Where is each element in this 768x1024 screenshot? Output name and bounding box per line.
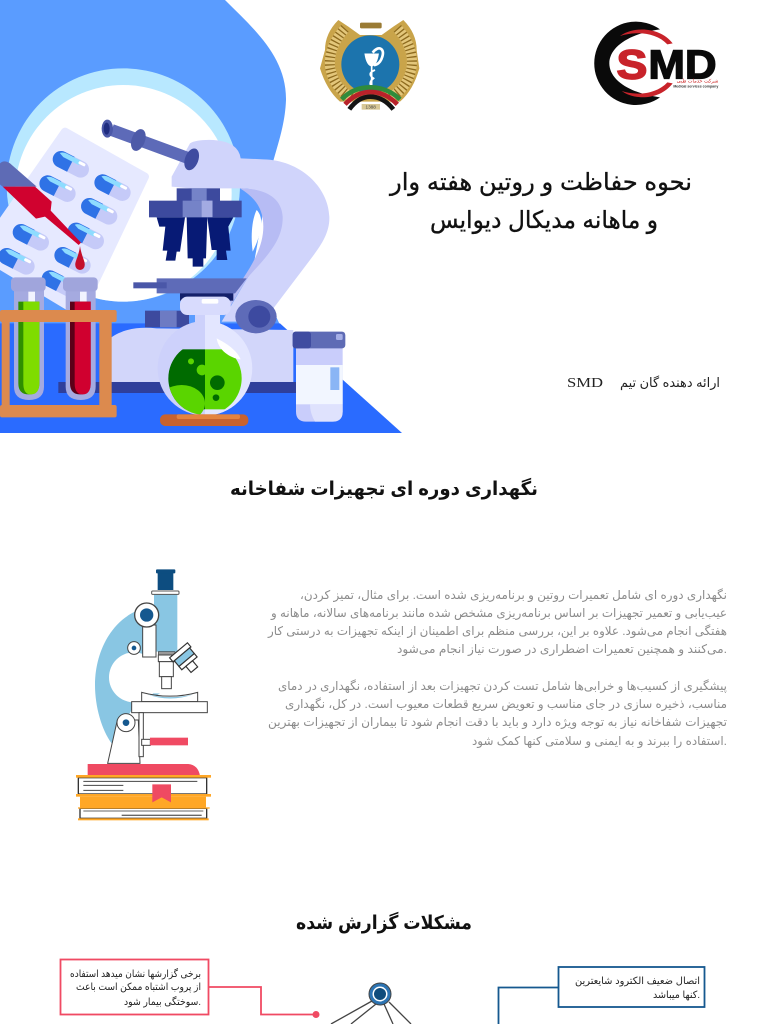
maintenance description text: هفتگی انجام می‌شود. علاوه بر این، بررسی منظم برای اطمینان از اینکه تجهیزات به درستی کار: [267, 624, 727, 639]
callout: weak electrode: کنها میباشد.: [653, 990, 700, 1001]
gold wreath: [320, 20, 419, 102]
objective turret: [177, 188, 220, 202]
logo: SMD: Medical services company: [673, 84, 719, 89]
callout: probe burn: از پروب اشتباه ممکن است باعث: [76, 982, 201, 993]
title: نحوه حفاظت و روتین هفته وار: [389, 169, 692, 196]
title: [389, 169, 692, 234]
logo: SMD: MD: [648, 41, 717, 87]
focus knob: [235, 300, 277, 333]
maintenance description text: تجهیزات شفاخانه نیاز به توجه ویژه دارد و باید با دقت انجام شود تا بیماران از تجهیزات بهترین: [268, 715, 727, 730]
pillar: [108, 720, 140, 763]
test tubes with rack: [0, 277, 117, 417]
logo: SMD: [594, 22, 719, 105]
callout: probe burn: سوختگی بیمار شود.: [124, 996, 201, 1008]
maintenance description text: پیشگیری از کسیب‌ها و خرابی‌ها شامل تست کردن تجهیزات بعد از استفاده، نگهداری در دمای: [278, 679, 727, 694]
microscope: [58, 120, 329, 393]
stage: [132, 702, 207, 713]
darker blue floor: [0, 323, 402, 433]
top plaque: [360, 23, 382, 28]
red handle: [150, 738, 188, 745]
white circle: [15, 85, 232, 302]
hub node with spokes: [331, 983, 411, 1024]
stacked books: [76, 764, 211, 820]
title: و ماهانه مدیکال دیوایس: [430, 207, 658, 234]
light circle: [7, 68, 240, 302]
dropper with red drop: [0, 161, 85, 270]
microscope illustration: [76, 569, 211, 820]
logo: ministry emblem: 1388: [365, 104, 376, 109]
side revolver: [170, 643, 204, 677]
stage: [180, 293, 233, 301]
slide dish: [142, 692, 198, 702]
eyepiece: [158, 572, 173, 590]
callout: weak electrode: [558, 967, 704, 1007]
head: [143, 625, 156, 657]
presenter line: SMD: [567, 376, 603, 391]
maintenance description text: عیب‌یابی و تعمیر تجهیزات بر اساس برنامه‌ریزی مشخص شده مانند برنامه‌های سالانه، ماهانه و: [270, 606, 727, 621]
maintenance description text: می‌کنند و همچنین تعمیرات اضطراری در صورت نیاز انجام می‌شود.: [397, 642, 727, 657]
section heading: maintenance: نگهداری دوره ای تجهیزات شفاخانه: [230, 477, 538, 500]
background blue blob: [0, 0, 286, 325]
callout: probe burn: [60, 960, 208, 1014]
wheat ears: [330, 28, 412, 98]
connector: blue: [498, 988, 558, 1024]
staff of hygieia: [365, 48, 383, 85]
pill blister sheet: [0, 132, 145, 313]
maintenance description text: استفاده را ببرند و به ایمنی و سلامتی کنها کمک شود.: [472, 734, 727, 749]
blue seal: [341, 35, 399, 93]
microscope arm: [95, 612, 160, 743]
tricolour arc: [342, 87, 400, 109]
objective lenses: [157, 217, 185, 261]
SMD wordmark: S: [617, 41, 647, 87]
hero illustration: laboratory equipment: [0, 0, 402, 433]
maintenance description text: نگهداری دوره ای شامل تعمیرات روتین و برنامه‌ریزی شده است. برای مثال، تمیز کردن،‏: [300, 588, 727, 603]
presenter line: [567, 375, 720, 391]
logo: ministry emblem: [320, 20, 419, 110]
red arcs: [620, 29, 673, 44]
arm: [172, 140, 329, 322]
base: [110, 328, 293, 383]
flask with green liquid: [158, 297, 252, 426]
section heading: reported problems: مشکلات گزارش شده: [296, 911, 472, 934]
connector: red: [208, 987, 320, 1018]
specimen jar: [293, 332, 345, 422]
callout: probe burn: برخی گزارشها نشان میدهد استفاده: [70, 968, 201, 980]
maintenance description text: [267, 588, 727, 749]
logo subtitle: شرکت خدمات طبی: [677, 79, 718, 85]
callout: weak electrode: اتصال ضعیف الکترود شایعترین: [575, 976, 700, 987]
black crescent: [594, 22, 660, 105]
maintenance description text: مناسب، ذخیره سازی در جای مناسب و تعویض سریع قطعات معیوب است. در کل، نگهداری: [285, 697, 727, 712]
eyepiece tube: [112, 130, 192, 159]
year plate: [362, 104, 380, 110]
presenter line: ارائه دهنده گان تیم: [620, 375, 720, 391]
objective: [158, 652, 175, 655]
